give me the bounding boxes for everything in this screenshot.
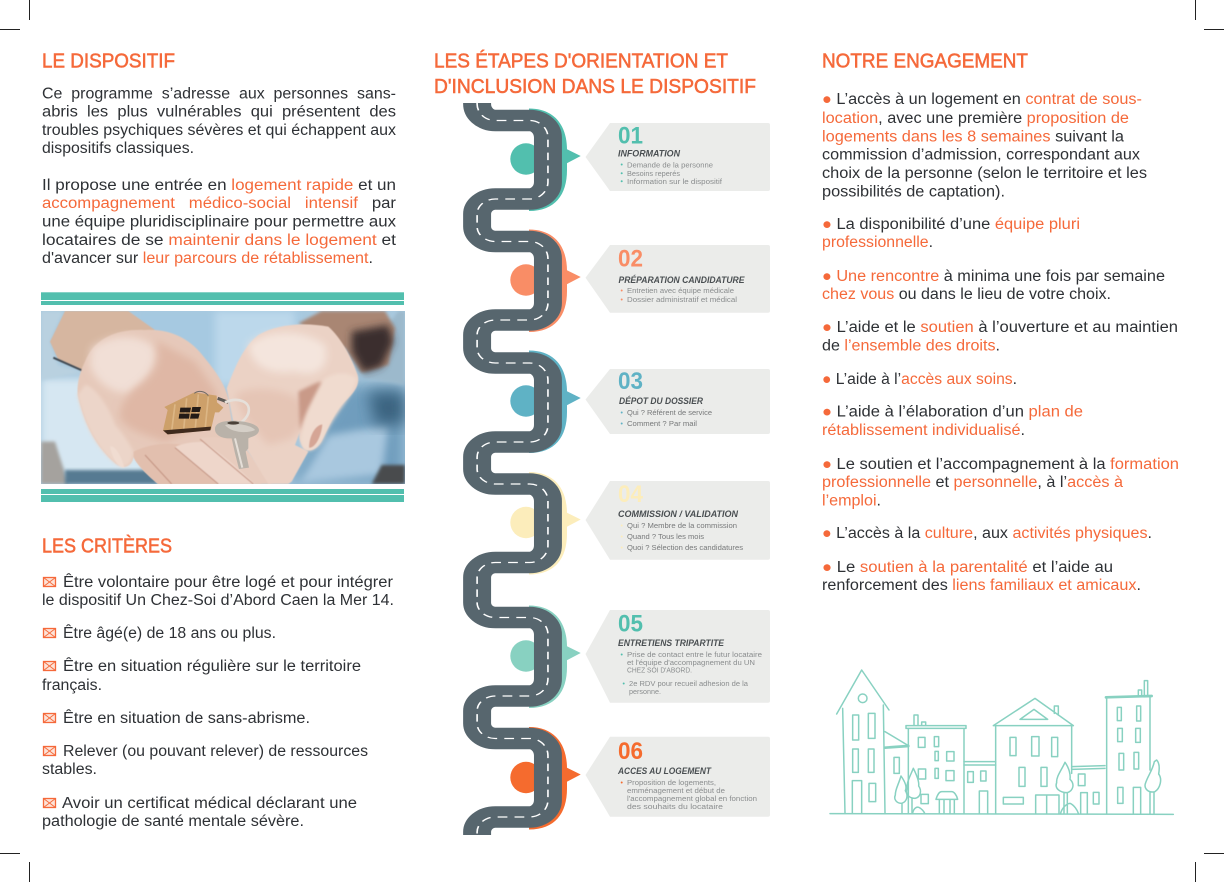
panel: step 05: personne. [629,687,661,696]
bottom teal stripes [41,489,404,502]
heading: les étapes: LES ÉTAPES D'ORIENTATION ET [434,50,728,73]
panel: step 06: ACCES AU LOGEMENT [617,766,712,777]
item: culture: ● L’accès à la culture, aux activités physiques . [822,525,1152,542]
text block: dispositif details: d'avancer sur leur parcours de rétablissement . [42,250,373,267]
criterion 1: le dispositif Un Chez-Soi d’Abord Caen la Mer 14. [42,592,394,609]
panel: step 04: Quand ? Tous les mois [627,532,704,541]
list: critères [42,574,394,830]
panel: step 04: COMMISSION / VALIDATION [618,509,739,520]
item: formation: ● Le soutien et l’accompagnement à la formation [822,456,1179,473]
panel: step 04: 04 [618,481,644,508]
criterion 5: stables. [42,761,97,778]
icon: key ring and key [194,391,259,469]
right forearm [298,311,395,372]
criterion 6: pathologie de santé mentale sévère. [42,813,304,830]
marker 05 [510,606,581,708]
right hand [227,324,358,484]
panel: step 02 [586,245,770,313]
left hand [77,330,262,484]
panel: step 01: 01 [618,122,643,149]
item: plan [822,404,1083,439]
panel: step 04: Quoi ? Sélection des candidatures [627,543,743,552]
panel: step 02: Entretien avec équipe médicale [627,286,734,295]
marker 04 [510,472,581,574]
icon: wooden house keychain [163,392,223,434]
item: parentalité: ● Le soutien à la parentalité et l’aide au [822,559,1113,576]
panel: step 03: 03 [618,368,643,395]
panel: step 04 [586,481,770,560]
item: formation: professionnelle et personnelle, à l’accès à [822,474,1123,491]
panel: step 03: Qui ? Référent de service [627,408,712,417]
item: formation: l’emploi. [822,492,881,510]
heading: le dispositif: LE DISPOSITIF [42,50,175,73]
criterion 1: Être volontaire pour être logé et pour intégrer [63,574,393,591]
panel: step 06: 06 [618,738,643,765]
panel: step 02: 02 [618,246,643,273]
item: plan: ● L’aide à l’élaboration d’un plan de [822,404,1083,420]
item: droits [822,319,1178,354]
panel: step 03: DÉPOT DU DOSSIER [619,396,703,407]
item: équipe [822,216,1080,251]
item: plan: rétablissement individualisé . [822,422,1025,439]
item: logement: logements dans les 8 semaines suivant la [822,129,1124,146]
text block: dispositif intro: dispositifs classiques. [42,140,194,157]
criterion 3 [42,658,361,694]
item: logement: location, avec une première proposition de [822,110,1129,127]
panel: step 05: ENTRETIENS TRIPARTITE [618,638,725,649]
panel: step 01: INFORMATION [618,148,681,159]
criterion 6: Avoir un certificat médical déclarant une [62,795,357,812]
heading: les critères: LES CRITÈRES [42,535,172,558]
item: équipe: professionnelle. [822,234,933,251]
item: logement: choix de la personne (selon le territoire et les [822,165,1147,182]
item: logement: commission d’admission, correspondant aux [822,147,1140,164]
item: rencontre: chez vous ou dans le lieu de votre choix. [822,286,1111,303]
criterion 3: français. [42,677,102,694]
heading: notre engagement: NOTRE ENGAGEMENT [822,50,1028,73]
winding road [477,103,548,835]
panel: step 06: l'accompagnement global en fonction [627,794,757,803]
item: logement: possibilités de captation). [822,184,1005,201]
heading: les étapes: D'INCLUSION DANS LE DISPOSITIF [434,75,756,98]
panel: step 05: et l'équipe d'accompagnement du UN [627,658,755,667]
item: équipe: ● La disponibilité d’une équipe pluri [822,216,1080,233]
item: logement: ● L’accès à un logement en contrat de sous- [822,91,1142,108]
panel: step 06 [586,737,770,817]
panel: step 03: Comment ? Par mail [627,419,697,428]
text block: engagement list [822,91,1179,594]
criterion 5: Relever (ou pouvant relever) de ressources [63,743,368,760]
step colour markers [510,108,581,830]
panel: step 05: 2e RDV pour recueil adhesion de la [629,679,749,688]
item: droits: de l’ensemble des droits . [822,338,1000,354]
item: soins: ● L’aide à l’accès aux soins. [822,371,1017,388]
text block: dispositif intro: troubles psychiques sévères et qui échappent aux [42,122,396,139]
criterion 6 [42,795,357,830]
text block: dispositif details: locataires de se maintenir dans le logement et [42,232,397,249]
text block: dispositif details: Il propose une entrée en logement rapide et un [42,177,396,194]
text block: dispositif intro: abris les plus vulnérables qui présentent des [42,104,396,121]
panel: step 05: Prise de contact entre le futur locataire [627,650,762,659]
panel: step 01: Demande de la personne [627,160,713,169]
criterion 3: Être en situation régulière sur le territoire [63,658,361,675]
panel: step 04: Qui ? Membre de la commission [627,521,737,530]
panel: step 01 [586,122,770,191]
panel: step 01: Besoins reperés [627,169,680,178]
text block: dispositif intro [42,85,396,157]
photo: hands holding house key [41,311,405,484]
text block: dispositif details: une équipe pluridisciplinaire pour permettre aux [42,214,396,231]
panel: step 06: emménagement et début de [627,786,725,795]
illustration: row of houses [830,670,1173,814]
criterion 5 [42,743,368,778]
panel: step 02: PRÉPARATION CANDIDATURE [618,275,745,286]
marker 01 [510,108,581,211]
panel: step 02: Dossier administratif et médical [627,295,737,304]
heading: les étapes [434,50,756,98]
panel: step 03 [586,368,770,434]
criterion 4: Être en situation de sans-abrisme. [63,710,310,727]
item: rencontre [822,268,1165,303]
item: rencontre: ● Une rencontre à minima une fois par semaine [822,268,1165,285]
text block: dispositif intro: Ce programme s’adresse aux personnes sans- [42,85,396,102]
item: parentalité [822,559,1141,594]
panel: step 05 [586,610,770,703]
item: formation [822,456,1179,510]
marker 03 [510,350,581,453]
panel: step 05: 05 [618,611,643,638]
panel: step 06: Proposition de logements, [627,778,716,787]
panel: step 01: Information sur le dispositif [627,177,723,186]
item: logement [822,91,1147,201]
left forearm [50,311,155,371]
criterion 1 [42,574,394,609]
top teal stripes [41,292,404,305]
lower fingers [134,437,272,484]
panel: step 05: CHEZ SOI D'ABORD. [627,666,692,675]
criterion 2: Être âgé(e) de 18 ans ou plus. [63,625,276,642]
panel: step 06: des souhaits du locataire [627,802,723,811]
text block: dispositif details [42,177,397,267]
item: parentalité: renforcement des liens familiaux et amicaux . [822,577,1141,594]
marker 02 [510,230,581,332]
marker 06 [510,727,581,830]
text block: dispositif details: accompagnement médico-social intensif par [42,195,396,212]
item: droits: ● L’aide et le soutien à l’ouverture et au maintien [822,319,1178,336]
